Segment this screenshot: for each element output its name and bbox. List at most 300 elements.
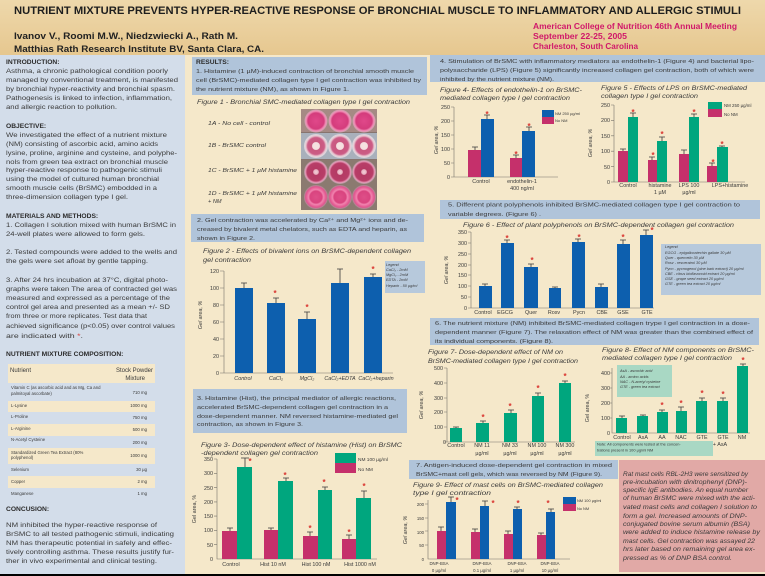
text box: finding 2: creased by bivalent metal chelators, such as EDTA and heparin, as: [197, 227, 407, 233]
figure 9 caption: Figure 9- Effect of mast cells on BrSMC-mediated collagen: [413, 482, 603, 489]
figure 3: histamine bar chart: 350: [204, 457, 213, 463]
figure 9: mast cells bar chart: 150: [417, 516, 425, 521]
nutrient mixture composition table: Standardized Green Tea Extract (80%: [11, 450, 83, 455]
figure 3: histamine bar chart: *: [308, 524, 312, 533]
figure 5: LPS bar chart: 1 µM: [654, 190, 667, 196]
figure 9: mast cells bar chart: DNP-BSA: [429, 561, 449, 566]
figure 6: plant polyphenols bar chart: 250: [458, 252, 467, 258]
figure 1 labels: 1A - No cell - control: [208, 121, 271, 127]
panel: mast cell methods callout: vated mast cells and collagen I solution to: [623, 505, 758, 511]
nutrient mixture composition table: Mixture: [125, 376, 146, 382]
figure 3: histamine bar chart: 100: [204, 528, 213, 534]
figure 5: LPS bar chart: LPS+histamine: [712, 183, 748, 189]
nutrient mixture composition table: N-Acetyl Cysteine: [11, 437, 46, 442]
figure 4 legend: NM 250 µg/ml: [555, 111, 580, 116]
figure 2: bivalent ions bar chart: CaCl₂+EDTA: [324, 376, 356, 382]
figure 9 caption: type I gel contraction: [413, 490, 492, 497]
figure 4 legend: No NM: [555, 118, 567, 123]
figure 6 legend: Rosv - resveratrol 30 µM: [665, 261, 707, 265]
figure 3: histamine bar chart: *: [248, 457, 252, 466]
figure 6: plant polyphenols bar chart: 150: [458, 273, 467, 279]
materials and methods: graphs were taken The area of contracted gel was: [6, 286, 178, 293]
figure 6: plant polyphenols bar chart: *: [505, 234, 509, 243]
panel: mast cell methods callout: [619, 460, 765, 572]
text box: finding 5: 5. Different plant polyphenols inhibited BrSMC-mediated collagen type I gel contraction to: [448, 202, 740, 208]
figure 9: mast cells bar chart: 50: [419, 543, 425, 548]
figure 6: plant polyphenols bar chart: GTE: [641, 310, 653, 316]
panel: mast cell methods callout: pre-incubation with dinitrophenyl (DNP)-: [622, 480, 747, 486]
figure 3: histamine bar chart: 250: [204, 486, 213, 492]
figure 8: NM components bar chart: Control: [613, 435, 631, 441]
figure 5: LPS bar chart: 250: [601, 103, 610, 109]
figure 6 caption: Figure 6 - Effect of plant polyphenols on BrSMC-dependent collagen gel contraction: [463, 222, 734, 229]
materials and methods: 1. Collagen I solution mixed with human BrSMC in: [6, 222, 176, 229]
materials and methods: 3. After 24 hrs incubation at 37°C, digital photo-: [6, 276, 168, 284]
figure 7: NM dose bar chart: 300: [434, 396, 443, 402]
figure 6: plant polyphenols bar chart: 0: [464, 306, 467, 312]
figure 1 labels: [208, 121, 297, 205]
figure 9: mast cells bar chart: 200: [417, 502, 425, 507]
figure 2: bivalent ions bar chart: CaCl₂: [269, 376, 284, 382]
nutrient mixture composition table: L-Lysine: [11, 403, 28, 408]
figure 8: NM components bar chart: *: [660, 401, 664, 410]
introduction: and allergic reaction to pollution.: [6, 104, 117, 111]
figure 8: NM components bar chart: GTE: [717, 435, 729, 441]
nutrient mixture composition table: 1 mg: [137, 491, 148, 496]
figure 2 legend: Legend: [386, 263, 400, 267]
text box: finding 7: 7. Antigen-induced dose-dependent gel contraction in mixed: [416, 463, 612, 469]
figure 9: mast cells bar chart: DNP-BSA: [472, 561, 492, 566]
objective: using the model of cultured human bronchial: [6, 176, 160, 183]
figure 3 caption: -dependent collagen gel contraction: [201, 450, 319, 457]
figure 4: endothelin bar chart: *: [514, 150, 518, 159]
figure 7: NM dose bar chart: 400: [434, 381, 443, 387]
figure 5 caption: collagen type I gel contraction: [601, 93, 698, 100]
figure 9: mast cells bar chart: Gel area, %: [403, 516, 409, 544]
figure 8 note: trations present in 100 µg/ml NM: [597, 448, 653, 452]
text box: finding 7: [409, 460, 618, 479]
figure 3: histamine bar chart: 300: [204, 471, 213, 477]
figure 4 caption: mediated collagen type I gel contraction: [440, 95, 571, 102]
figure 5: LPS bar chart: 200: [601, 118, 610, 124]
nutrient mixture composition table: 500 mg: [133, 427, 148, 432]
figure 6: plant polyphenols bar chart: Rosv: [548, 310, 560, 316]
figure 9 caption: [413, 482, 603, 497]
figure 2: bivalent ions bar chart: 60: [213, 320, 219, 326]
conclusion: NM inhibited the hyper-reactive response of: [6, 522, 157, 529]
figure 7: NM dose bar chart: NM 11: [474, 443, 490, 449]
figure 9: mast cells bar chart: *: [455, 496, 459, 505]
figure 6: plant polyphenols bar chart: *: [621, 233, 625, 242]
figure 8 legend: AsA - ascorbic acid: [619, 369, 653, 373]
figure 8 caption: [602, 347, 754, 362]
figure 2 legend: Heparin - 50 µg/ml: [386, 284, 417, 288]
figure 8 caption: Figure 8- Effect of NM components on BrSMC-: [602, 347, 754, 354]
figure 3 caption: Figure 3- Dose-dependent effect of histamine (Hist) on BrSMC: [201, 442, 402, 449]
conference details: September 22-25, 2005: [533, 32, 628, 41]
figure 7: NM dose bar chart: NM 300: [556, 443, 574, 449]
figure 3: histamine bar chart: [192, 442, 402, 568]
figure 4 caption: Figure 4- Effects of endothelin-1 on BrSMC-: [440, 87, 582, 94]
figure 2 caption: [203, 248, 412, 264]
figure 8: NM components bar chart: AsA: [638, 435, 648, 441]
panel: mast cell methods callout: conjugated bovine serum albumin (BSA): [623, 522, 750, 528]
figure 5 legend: [708, 102, 751, 117]
figure 3 legend: [335, 453, 388, 473]
nutrient mixture composition table: L-Proline: [11, 414, 29, 419]
text box: finding 6: dependent manner (Figure 7). The relaxation effect of NM was greater than the combined effect of: [435, 330, 754, 336]
figure 7 caption: [428, 349, 578, 365]
figure 4: endothelin bar chart: 200: [441, 119, 450, 125]
nutrient mixture composition table: Copper: [11, 479, 26, 484]
text box: finding 7: BrSMC+mast cell gels, which was reversed by NM (Figure 9).: [416, 472, 603, 478]
conference details: [533, 22, 737, 51]
figure 4: endothelin bar chart: 50: [444, 161, 450, 167]
figure 1: gel contraction photo: [197, 99, 410, 210]
nutrient mixture composition table: 750 mg: [133, 415, 148, 420]
figure 2: bivalent ions bar chart: Gel area, %: [198, 301, 204, 329]
objective: (NM) consisting of ascorbic acid, amino acids: [6, 141, 159, 148]
objective: three-dimension collagen type I gel.: [6, 194, 128, 201]
panel: mast cell methods callout: mast cells. Gel contraction was assayed 22: [623, 539, 756, 545]
figure 5: LPS bar chart: *: [631, 108, 635, 117]
figure 3: histamine bar chart: 50: [207, 543, 213, 549]
figure 5: LPS bar chart: *: [720, 140, 724, 149]
authors: Ivanov V., Roomi M.W., Niedzwiecki A., Rath M.: [14, 31, 238, 41]
bottom edge: [0, 574, 765, 576]
introduction: INTRODUCTION:: [6, 59, 60, 66]
panel: mast cell methods callout: Rat mast cells RBL-2H3 were sensitized by: [623, 472, 749, 478]
figure 6: plant polyphenols bar chart: Quer: [525, 310, 537, 316]
figure 9: mast cells bar chart: DNP-BSA: [540, 561, 560, 566]
figure 9: mast cells bar chart: *: [516, 499, 520, 508]
figure 3: histamine bar chart: *: [347, 528, 351, 537]
materials and methods: 24-well plates were allowed to form gels.: [6, 231, 145, 238]
results text box: cell (BrSMC)-mediated collagen type I gel contraction was inhibited by: [196, 78, 421, 84]
text box: finding 6: 6. The nutrient mixture (NM) inhibited BrSMC-mediated collagen trype I gel contraction in a dose-: [435, 321, 750, 327]
figure 8: NM components bar chart: 300: [601, 386, 610, 392]
figure 7: NM dose bar chart: NM 33: [502, 443, 518, 449]
materials and methods: are indicated with *.: [6, 333, 83, 340]
figure 9: mast cells bar chart: 0.1 µg/ml: [473, 568, 491, 573]
figure 7: NM dose bar chart: Control: [447, 443, 465, 449]
text box: finding 2: [191, 214, 424, 242]
figure 5: LPS bar chart: Gel area, %: [588, 129, 594, 157]
figure 9: mast cells bar chart: DNP-BSA: [507, 561, 527, 566]
figure 2: bivalent ions bar chart: 100: [210, 286, 219, 292]
figure 7: NM dose bar chart: 100: [434, 425, 443, 431]
text box: finding 4: inhibited by the nutrient mixture (NM).: [440, 77, 555, 83]
nutrient mixture composition table: Manganese: [11, 491, 34, 496]
figure 6 legend: GTE - green tea extract 20 µg/ml: [665, 282, 721, 286]
figure 2: bivalent ions bar chart: Control: [234, 376, 252, 382]
figure 7: NM dose bar chart: µg/ml: [530, 451, 544, 457]
figure 5 caption: [601, 85, 747, 100]
materials and methods: the gels were set afloat by gentle tapping.: [6, 258, 148, 265]
figure 8: NM components bar chart: *: [679, 399, 683, 408]
text box: finding 5: variable degrees. (Figure 6) .: [448, 212, 542, 218]
figure 6: plant polyphenols bar chart: 200: [458, 263, 467, 269]
figure 6 legend: Legend: [665, 245, 679, 249]
panel: left column: [0, 55, 185, 575]
figure 3: histamine bar chart: Gel area, %: [192, 495, 198, 523]
figure 6: plant polyphenols bar chart: 300: [458, 241, 467, 247]
figure 5: LPS bar chart: 150: [601, 134, 610, 140]
figure 3: histamine bar chart: Control: [222, 562, 240, 568]
figure 6: plant polyphenols bar chart: GSE: [617, 310, 629, 316]
figure 3 legend: No NM: [358, 467, 373, 473]
figure 6: plant polyphenols bar chart: 350: [458, 230, 467, 236]
figure 1 labels: 1C - BrSMC + 1 µM histamine: [208, 168, 297, 174]
conference details: Charleston, South Carolina: [533, 42, 639, 51]
figure 6 legend: Quer - quercetin 30 µM: [665, 256, 705, 260]
conclusion: NM has therapeutic potential in safely and effec-: [6, 540, 172, 547]
figure 3: histamine bar chart: Hist 10 nM: [260, 562, 286, 568]
figure 9 legend: No NM: [577, 506, 589, 511]
results text box: the nutrient mixture (NM), as shown in Figure 1.: [196, 87, 350, 93]
figure 8 caption: mediated collagen type I gel contraction: [602, 355, 733, 362]
conclusion: [6, 506, 174, 565]
figure 7: NM dose bar chart: µg/ml: [475, 451, 489, 457]
figure 1 labels: 1B - BrSMC control: [208, 143, 267, 149]
figure 2: bivalent ions bar chart: MgCl₂: [300, 376, 315, 382]
figure 3: histamine bar chart: 200: [204, 500, 213, 506]
nutrient mixture composition table: 2 mg: [137, 479, 148, 484]
figure 3: histamine bar chart: 150: [204, 514, 213, 520]
figure 8 legend: NAC - N-acetyl cysteine: [620, 380, 660, 384]
figure 8: NM components bar chart: GTE: [696, 435, 708, 441]
objective: We investigated the effect of a nutrient mixture: [6, 132, 167, 139]
nutrient mixture composition table: palmitoyal ascorbate): [11, 391, 52, 396]
figure 8: NM components bar chart: NM: [738, 435, 747, 441]
figure 6 legend: [661, 244, 761, 295]
figure 2 legend: MgCl₂ - 2mM: [386, 273, 409, 277]
figure 5 legend: No NM: [724, 112, 738, 117]
figure 4: endothelin bar chart: 100: [441, 147, 450, 153]
figure 2 legend: EDTA - 2mM: [386, 278, 408, 282]
objective: smooth muscle cells (BrSMC) embodded in a: [6, 185, 157, 192]
figure 7: NM dose bar chart: µg/ml: [503, 451, 517, 457]
figure 8: NM components bar chart: [585, 347, 754, 456]
figure 7: NM dose bar chart: µg/ml: [558, 451, 572, 457]
figure 8: NM components bar chart: AA: [658, 435, 666, 441]
figure 7 caption: Figure 7- Dose-dependent effect of NM on: [428, 349, 563, 356]
figure 2 caption: gel contraction: [203, 257, 251, 264]
figure 3: histamine bar chart: Hist 100 nM: [302, 562, 331, 568]
nutrient mixture composition table: [6, 351, 155, 496]
nutrient mixture composition table: Nutrient: [10, 368, 31, 374]
nutrient mixture composition table: polyphenol): [11, 455, 34, 460]
nutrient mixture composition table: Stock Powder: [116, 368, 153, 374]
figure 5: LPS bar chart: 100: [601, 149, 610, 155]
nutrient mixture composition table: 30 µg: [136, 467, 148, 472]
figure 7: NM dose bar chart: *: [563, 372, 567, 381]
figure 9: mast cells bar chart: 1 µg/ml: [510, 568, 524, 573]
title: NUTRIENT MIXTURE PREVENTS HYPER-REACTIVE RESPONSE OF BRONCHIAL MUSCLE TO INFLAMMATORY AND ALLERGIC STIMULI: [14, 5, 741, 17]
figure 6: plant polyphenols bar chart: [444, 222, 761, 316]
figure 3 caption: [201, 442, 402, 457]
materials and methods: [6, 213, 178, 340]
figure 5 legend: NM 250 µg/ml: [724, 103, 751, 108]
figure 3: histamine bar chart: *: [283, 471, 287, 480]
figure 8 note: Note: All components were tested at the concen-: [597, 442, 681, 446]
figure 4: endothelin bar chart: Gel area, %: [434, 126, 440, 154]
figure 5: LPS bar chart: [588, 85, 751, 196]
introduction: by bronchial hyper-reactivity and bronchial spasm.: [6, 86, 175, 93]
figure 1 caption: Figure 1 - Bronchial SMC-mediated collagen type I gel contraction: [197, 99, 410, 106]
introduction: managed by conventional treatment, is manifested: [6, 77, 178, 84]
materials and methods: control gel area and presented as a mean +/- SD: [6, 304, 170, 311]
figure 4: endothelin bar chart: [434, 87, 582, 192]
figure 5 caption: Figure 5 - Effects of LPS on BrSMC-mediated: [601, 85, 747, 92]
nutrient mixture composition table: 200 mg: [133, 440, 148, 445]
figure 6 legend: GSE - grape seed extract 20 µg/ml: [665, 277, 724, 281]
objective: nols from green tea extract on bronchial muscle: [6, 159, 168, 166]
figure 2 caption: Figure 2 - Effects of bivalent ions on BrSMC-dependent collagen: [203, 248, 412, 255]
materials and methods: 2. Tested compounds were added to the wells and: [6, 249, 177, 256]
introduction: Asthma, a chronic pathological condition poorly: [6, 68, 169, 75]
text box: finding 6: its individual components. (Figure 8).: [435, 339, 554, 345]
nutrient mixture composition table: 1000 mg: [130, 453, 148, 458]
figure 9: mast cells bar chart: 0: [422, 557, 425, 562]
figure 8 note: [595, 441, 713, 456]
materials and methods: achieved significance (p<0.05) over control values: [6, 323, 176, 330]
text box: finding 4: [430, 55, 765, 83]
figure 7: NM dose bar chart: NM 100: [528, 443, 546, 449]
figure 4: endothelin bar chart: *: [527, 122, 531, 131]
figure 7: NM dose bar chart: 0: [443, 440, 446, 446]
figure 7: NM dose bar chart: 500: [434, 366, 443, 372]
authors: Matthias Rath Research Institute BV, Santa Clara, CA.: [14, 44, 264, 54]
figure 8: NM components bar chart: 200: [601, 401, 610, 407]
figure 9: mast cells bar chart: *: [491, 499, 495, 508]
figure 4: endothelin bar chart: 150: [441, 133, 450, 139]
figure 7: NM dose bar chart: [419, 349, 578, 457]
conference details: American College of Nutrition 46th Annual Meeting: [533, 22, 737, 31]
objective: OBJECTIVE:: [6, 123, 46, 130]
figure 2: bivalent ions bar chart: [198, 248, 425, 382]
panel: mast cell methods callout: specific IgE antibodies. An equal number: [623, 488, 749, 494]
text box: finding 2: shown in Figure 2.: [197, 236, 256, 242]
figure 2: bivalent ions bar chart: *: [371, 265, 375, 274]
text box: finding 4: polysaccharide (LPS) (Figure 5) significantly increased collagen gel contraction, both of which were: [440, 68, 754, 74]
results text box: RESULTS:: [196, 59, 229, 66]
figure 7: NM dose bar chart: *: [481, 413, 485, 422]
text box: finding 6: [430, 318, 759, 345]
figure 4: endothelin bar chart: Control: [472, 179, 490, 185]
figure 5: LPS bar chart: LPS 100: [679, 183, 699, 189]
figure 7: NM dose bar chart: Gel area, %: [419, 391, 425, 419]
objective: [6, 123, 177, 201]
figure 5: LPS bar chart: Control: [619, 183, 637, 189]
figure 9 legend: [563, 497, 601, 511]
figure 4: endothelin bar chart: endothelin-1: [507, 179, 537, 185]
introduction: Pathogenesis is linked to infection, inflammation,: [6, 95, 172, 102]
figure 2: bivalent ions bar chart: 120: [210, 269, 219, 275]
figure 4: endothelin bar chart: 0: [447, 175, 450, 181]
objective: hyper-reactive response to pathogenic stimuli: [6, 167, 163, 174]
figure 4 caption: [440, 87, 582, 102]
figure 6 legend: Pycn - pycnogenol (pine bark extract) 20 µg/ml: [665, 267, 744, 271]
results text box: 1. Histamine (1 µM)-induced contraction of bronchial smooth muscle: [196, 69, 414, 75]
photo of well plate: [301, 109, 377, 210]
materials and methods: measured and expressed as a percentage of the: [6, 295, 170, 302]
figure 6: plant polyphenols bar chart: Gel area, %: [444, 256, 450, 284]
figure 7: NM dose bar chart: *: [508, 402, 512, 411]
text box: finding 3: 3. Histamine (Hist), the principal mediator of allergic reactions,: [197, 396, 397, 402]
figure 2 legend: [385, 261, 425, 293]
figure 9: mast cells bar chart: 100: [417, 530, 425, 535]
figure 8: NM components bar chart: Gel area, %: [585, 394, 591, 422]
figure 7: NM dose bar chart: *: [536, 384, 540, 393]
panel: mast cell methods callout: of human BrSMC were mixed with the acti-: [623, 496, 755, 502]
figure 2: bivalent ions bar chart: CaCl₂+heparin: [358, 376, 394, 382]
authors: [14, 31, 264, 54]
figure 3 legend: NM 100 µg/ml: [358, 457, 388, 463]
figure 6: plant polyphenols bar chart: 50: [461, 295, 467, 301]
nutrient mixture composition table: L-Arginine: [11, 426, 31, 431]
figure 8: NM components bar chart: 100: [601, 416, 610, 422]
materials and methods: from three or more replicates. Test data that: [6, 313, 147, 320]
figure 5: LPS bar chart: 50: [604, 165, 610, 171]
nutrient mixture composition table: 1000 mg: [130, 403, 148, 408]
conclusion: CONCUSION:: [6, 506, 49, 513]
figure 6: plant polyphenols bar chart: CBE: [596, 310, 608, 316]
header banner: [0, 0, 765, 55]
figure 8: NM components bar chart: 0: [607, 431, 610, 437]
figure 8: NM components bar chart: 400: [601, 371, 610, 377]
figure 3: histamine bar chart: 0: [210, 557, 213, 563]
figure 6: plant polyphenols bar chart: 100: [458, 284, 467, 290]
figure 2: bivalent ions bar chart: 20: [213, 354, 219, 360]
figure 6: plant polyphenols bar chart: Pycn: [573, 310, 585, 316]
figure 6 legend: CBE - citrus bioflavonoid extract 20 µg/ml: [665, 272, 735, 276]
figure 9: mast cells bar chart: *: [546, 499, 550, 508]
figure 3: histamine bar chart: *: [322, 478, 326, 487]
figure 8: NM components bar chart: *: [721, 390, 725, 399]
figure 2: bivalent ions bar chart: 80: [213, 303, 219, 309]
panel: mast cell methods callout: were added to induce histamine release by: [623, 530, 761, 536]
nutrient mixture composition table: Selenium: [11, 467, 29, 472]
figure 8 legend: AA - amino acids: [619, 375, 649, 379]
text box: finding 3: dose-dependent manner. NM reversed histamine-mediated gel: [197, 414, 398, 420]
nutrient mixture composition table: Vitamin C (as ascorbic acid and as Mg, Ca and: [11, 385, 101, 390]
figure 5: LPS bar chart: 0: [607, 180, 610, 186]
text box: finding 3: contraction, as shown in Figure 3.: [197, 422, 304, 428]
figure 6: plant polyphenols bar chart: *: [530, 256, 534, 265]
figure 8: NM components bar chart: *: [700, 389, 704, 398]
figure 2: bivalent ions bar chart: 0: [216, 371, 219, 377]
conclusion: BrSMC to all tested pathogenic stimuli, indicating: [6, 531, 174, 538]
figure 2: bivalent ions bar chart: 40: [213, 337, 219, 343]
figure 4 legend: [542, 110, 580, 124]
figure 7 caption: BrSMC-mediated collagen type I gel contraction: [428, 358, 578, 365]
figure 9 legend: NM 100 µg/ml: [577, 498, 601, 503]
figure 5: LPS bar chart: *: [660, 130, 664, 139]
figure 5: LPS bar chart: *: [692, 108, 696, 117]
panel: mast cell methods callout: form a gel. Increased amounts of DNP-: [623, 514, 747, 520]
objective: lysine, proline, arginine and cysteine, and polyphe-: [6, 150, 177, 157]
figure 6 legend: EGCG - epigallocatechin gallate 30 µM: [665, 251, 732, 255]
figure 4: endothelin bar chart: 400 ng/ml: [510, 186, 534, 192]
figure 6: plant polyphenols bar chart: *: [650, 226, 654, 235]
conclusion: ther in vivo experimental and clinical testing.: [6, 558, 157, 565]
figure 8 legend: GTE - green tea extract: [620, 385, 661, 389]
figure 2: bivalent ions bar chart: *: [273, 289, 277, 298]
text box: finding 4: 4. Stimulation of BrSMC with inflammatory mediators as endothelin-1 (Figure 4) and bacterial lipo-: [440, 59, 754, 65]
introduction: [6, 59, 178, 111]
text box: finding 5: [440, 200, 760, 219]
